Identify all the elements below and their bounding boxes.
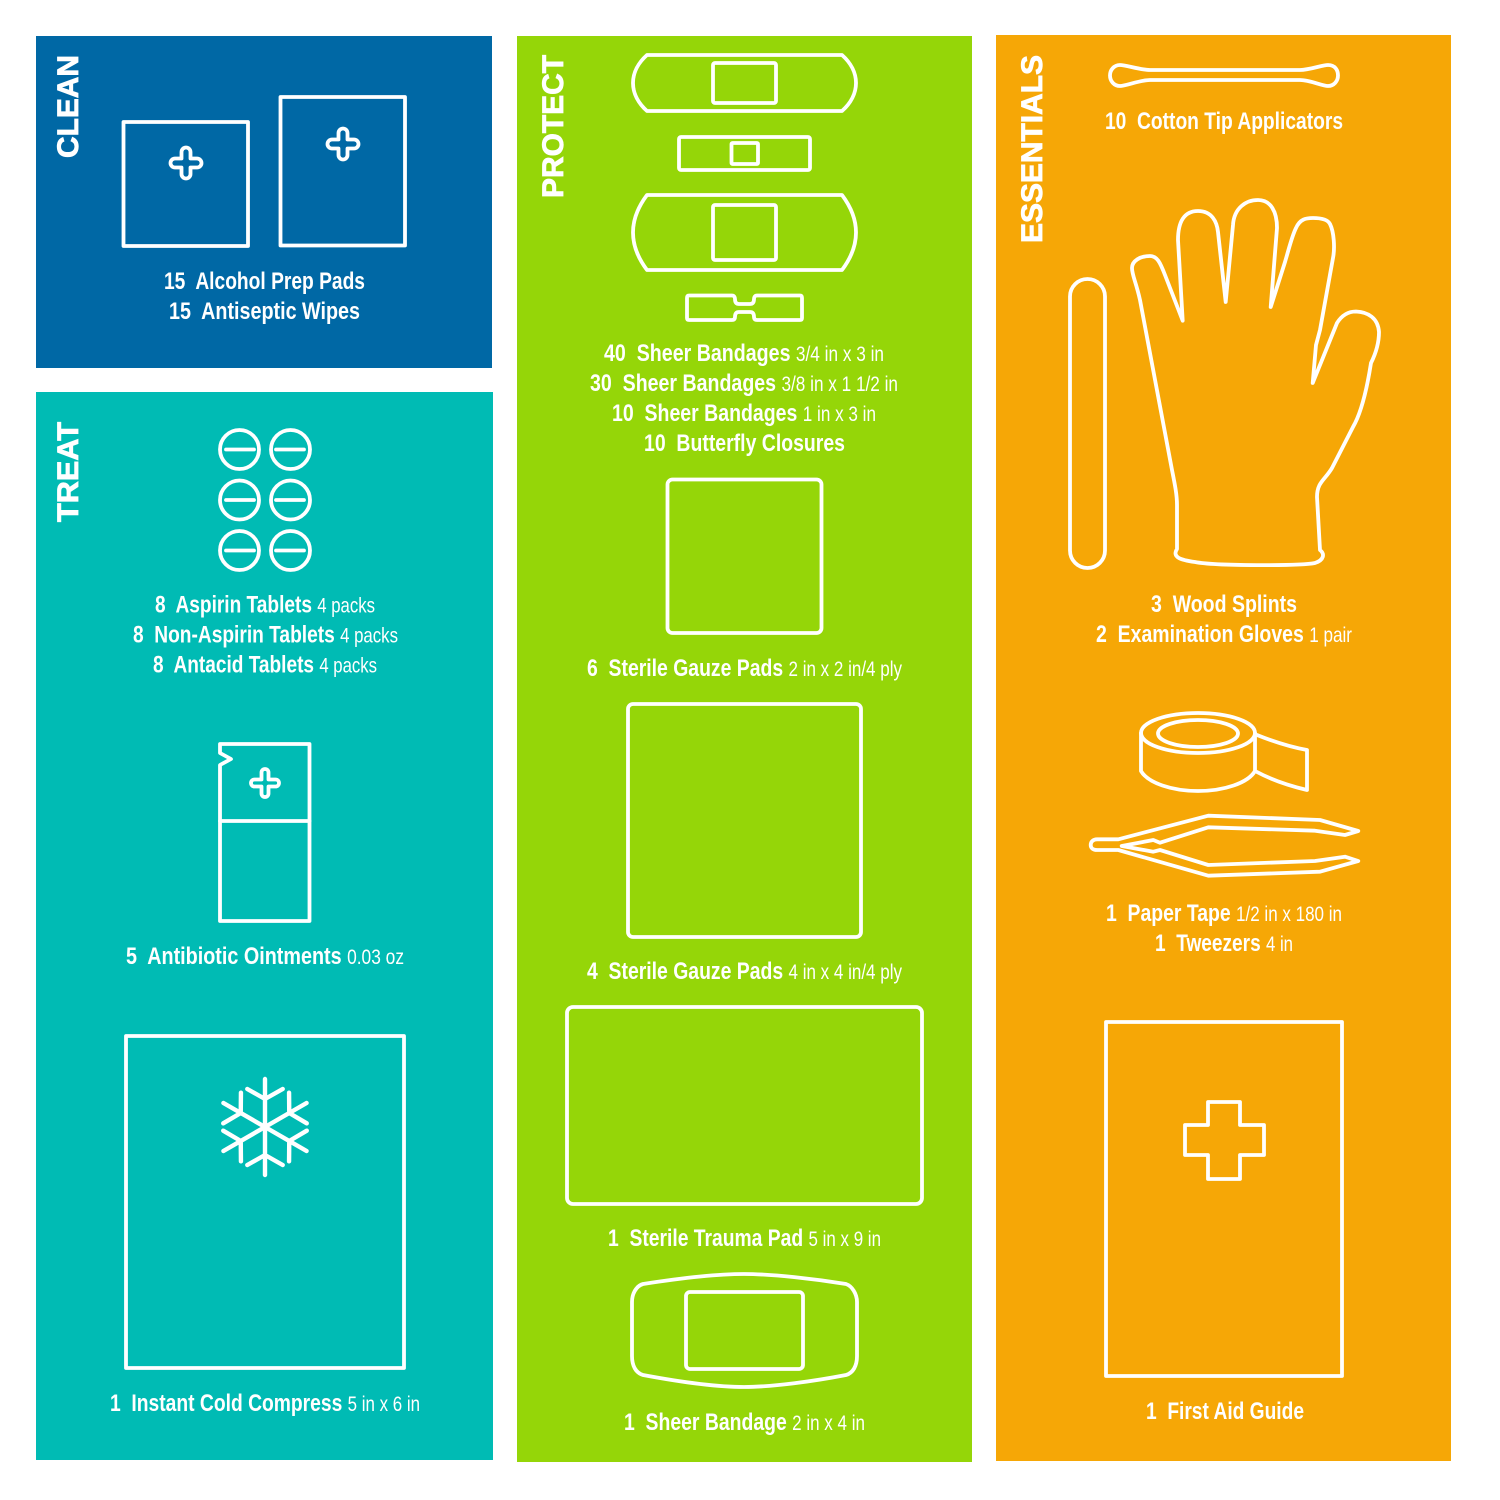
text: cold compress: 1 Instant Cold Compress 5 in x 6 in (110, 1390, 420, 1417)
text: sheer bandages: 10 Sheer Bandages 1 in x 3 in (612, 400, 876, 427)
text: splints and gloves: 3 Wood Splints (1151, 591, 1297, 618)
icon: tablets (220, 430, 310, 570)
text: tape and tweezers: 1 Tweezers 4 in (1155, 930, 1293, 957)
text: tablets: 8 Antacid Tablets 4 packs (153, 652, 377, 678)
heading: treat: TREAT (52, 422, 85, 522)
text: cotton tip applicators: 10 Cotton Tip Applicators (1105, 108, 1343, 135)
icon: small gauze pad (668, 480, 822, 633)
icon: trauma pad (567, 1007, 922, 1204)
text: sheer bandages: 40 Sheer Bandages 3/4 in x 3 in (604, 340, 884, 367)
icon: alcohol prep pad (124, 122, 248, 246)
text: small gauze pads: 6 Sterile Gauze Pads 2 in x 2 in/4 ply (587, 655, 902, 682)
panel: clean (36, 36, 492, 368)
icon: large gauze pad (628, 704, 861, 937)
icon: bandage small (679, 137, 810, 170)
text: tablets: 8 Aspirin Tablets 4 packs (155, 592, 375, 618)
text: splints and gloves (1096, 591, 1352, 648)
icon: paper tape (1141, 713, 1307, 791)
panel: essentials (996, 35, 1451, 1461)
text: clean items: 15 Alcohol Prep Pads (164, 268, 365, 295)
text: tablets (133, 592, 398, 678)
heading: protect: PROTECT (537, 55, 570, 198)
icon: butterfly closure (687, 296, 802, 320)
text: sheer bandage: 1 Sheer Bandage 2 in x 4 in (624, 1409, 865, 1436)
heading: essentials: ESSENTIALS (1016, 55, 1049, 243)
text: ointments: 5 Antibiotic Ointments 0.03 oz (126, 943, 404, 970)
icon: wood splint (1070, 279, 1105, 568)
icon: bandage wide (633, 195, 856, 270)
text: large gauze pads: 4 Sterile Gauze Pads 4 in x 4 in/4 ply (587, 958, 902, 985)
text: sheer bandages: 30 Sheer Bandages 3/8 in x 1 1/2 in (590, 370, 898, 397)
panel: treat (36, 392, 493, 1460)
icon: antibiotic ointment (220, 744, 310, 921)
icon: antiseptic wipe (280, 97, 405, 246)
icon: sheer bandage (632, 1274, 857, 1387)
icon: first aid guide (1106, 1022, 1342, 1376)
text: clean items: 15 Antiseptic Wipes (169, 298, 360, 325)
icon: cotton tip applicator (1110, 65, 1338, 86)
text: tape and tweezers: 1 Paper Tape 1/2 in x 180 in (1106, 900, 1342, 927)
text: trauma pad: 1 Sterile Trauma Pad 5 in x 9 in (608, 1225, 881, 1252)
text: sheer bandages (590, 340, 898, 457)
heading: clean: CLEAN (52, 55, 85, 158)
text: sheer bandages: 10 Butterfly Closures (644, 430, 845, 457)
panel: protect (517, 36, 972, 1462)
text: first aid guide: 1 First Aid Guide (1146, 1398, 1304, 1425)
text: clean items (164, 268, 365, 325)
icon: snowflake (215, 1079, 315, 1175)
text: tape and tweezers (1106, 900, 1342, 957)
icon: examination glove (1132, 200, 1379, 565)
text: tablets: 8 Non-Aspirin Tablets 4 packs (133, 622, 398, 648)
icon: cold compress (126, 1036, 404, 1368)
icon: bandage large (633, 55, 856, 111)
icon: tweezers (1091, 816, 1358, 876)
text: splints and gloves: 2 Examination Gloves 1 pair (1096, 621, 1352, 648)
